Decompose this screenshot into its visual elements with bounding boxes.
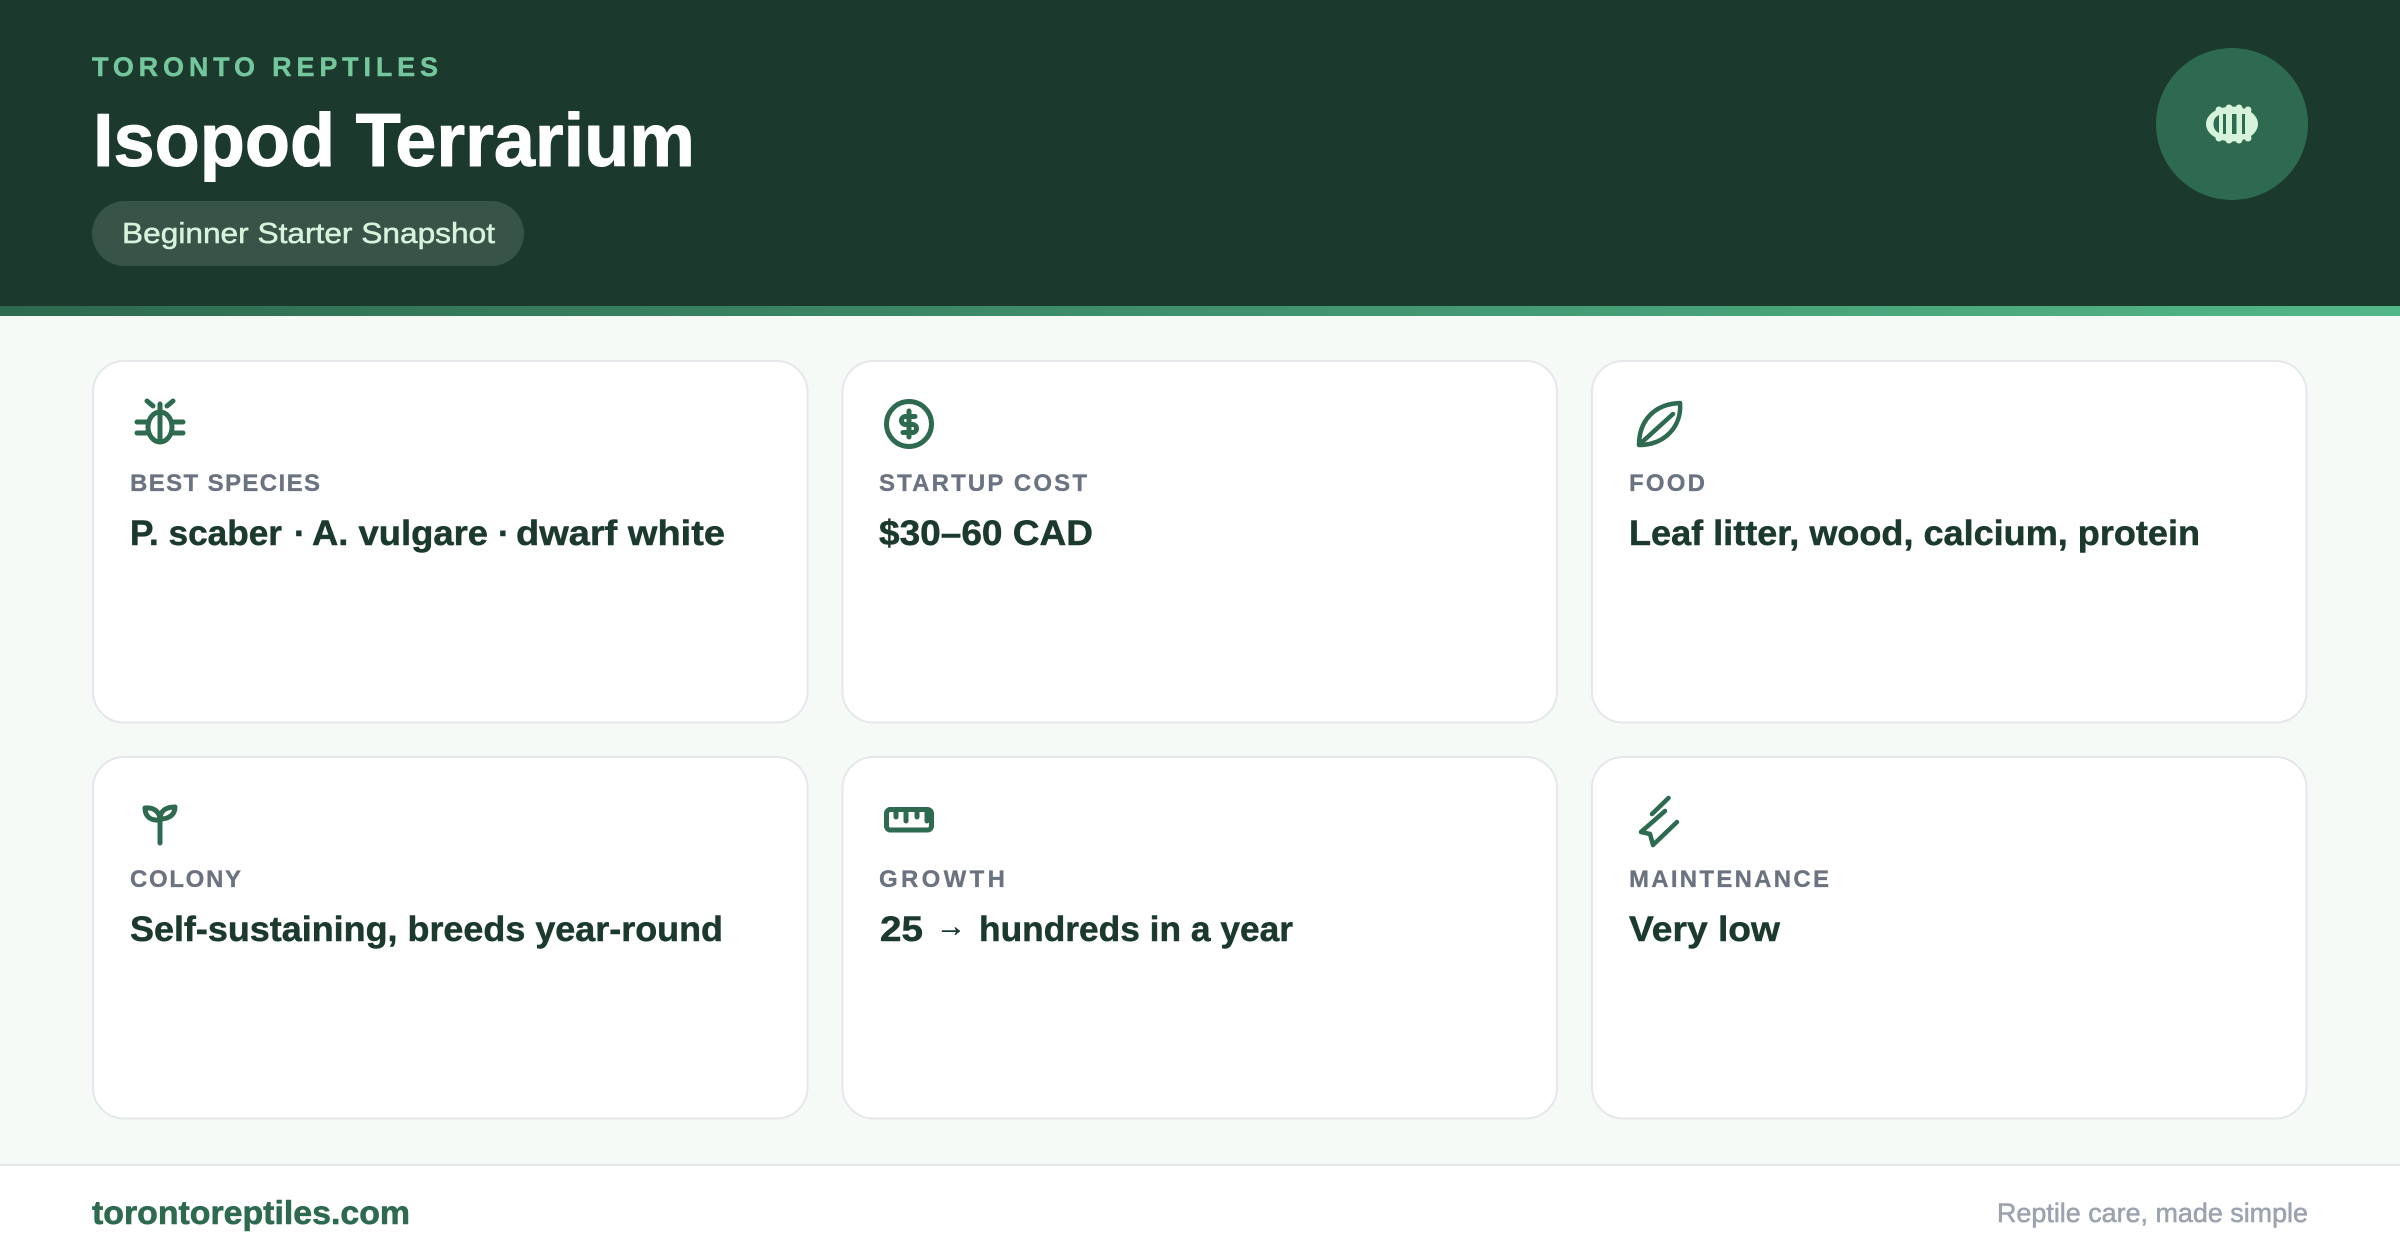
subtitle pill bbox=[92, 201, 524, 266]
label: maintenance: MAINTENANCE bbox=[1629, 866, 1829, 893]
icon: bug bbox=[137, 401, 183, 442]
panel: colony bbox=[93, 757, 808, 1118]
panel: maintenance bbox=[1592, 757, 2306, 1118]
label: startup cost: STARTUP COST bbox=[879, 470, 1087, 497]
value: best species: A. vulgare bbox=[312, 514, 488, 553]
value: best species: dwarf white bbox=[516, 514, 725, 553]
value: food: Leaf litter, wood, calcium, protein bbox=[1629, 514, 2200, 553]
brand eyebrow: TORONTO REPTILES bbox=[92, 52, 438, 82]
value: startup cost: $30–60 CAD bbox=[879, 514, 1093, 553]
panel: growth bbox=[842, 757, 1557, 1118]
value: growth: hundreds in a year bbox=[979, 910, 1293, 949]
icon: leaf bbox=[1639, 403, 1680, 445]
value: colony: Self-sustaining, breeds year-round bbox=[130, 910, 723, 949]
footer tagline: Reptile care, made simple bbox=[1997, 1198, 2308, 1228]
value: best species: P. scaber bbox=[130, 514, 282, 553]
panel: startup cost bbox=[842, 361, 1557, 722]
icon: isopod badge bbox=[2156, 48, 2308, 200]
icon: dollar coin bbox=[886, 402, 932, 446]
value: best species: · bbox=[498, 514, 510, 553]
footer bbox=[0, 1164, 2400, 1260]
subtitle pill: Beginner Starter Snapshot bbox=[122, 218, 495, 250]
icon: pencil bbox=[1641, 798, 1677, 845]
icon: sprout bbox=[145, 807, 175, 843]
footer website: torontoreptiles.com bbox=[92, 1194, 410, 1231]
value: best species: · bbox=[294, 514, 306, 553]
label: best species: BEST SPECIES bbox=[130, 470, 320, 497]
panel: food bbox=[1592, 361, 2306, 722]
label: food: FOOD bbox=[1629, 470, 1705, 497]
label: growth: GROWTH bbox=[879, 866, 1005, 893]
value: growth: 25 bbox=[880, 910, 923, 949]
value: maintenance: Very low bbox=[1629, 910, 1781, 949]
title: Isopod Terrarium bbox=[93, 98, 695, 182]
value: growth: → bbox=[936, 910, 966, 943]
panel: best species bbox=[93, 361, 808, 722]
label: colony: COLONY bbox=[130, 866, 241, 893]
icon: ruler bbox=[886, 810, 932, 830]
header band bbox=[0, 0, 2400, 316]
